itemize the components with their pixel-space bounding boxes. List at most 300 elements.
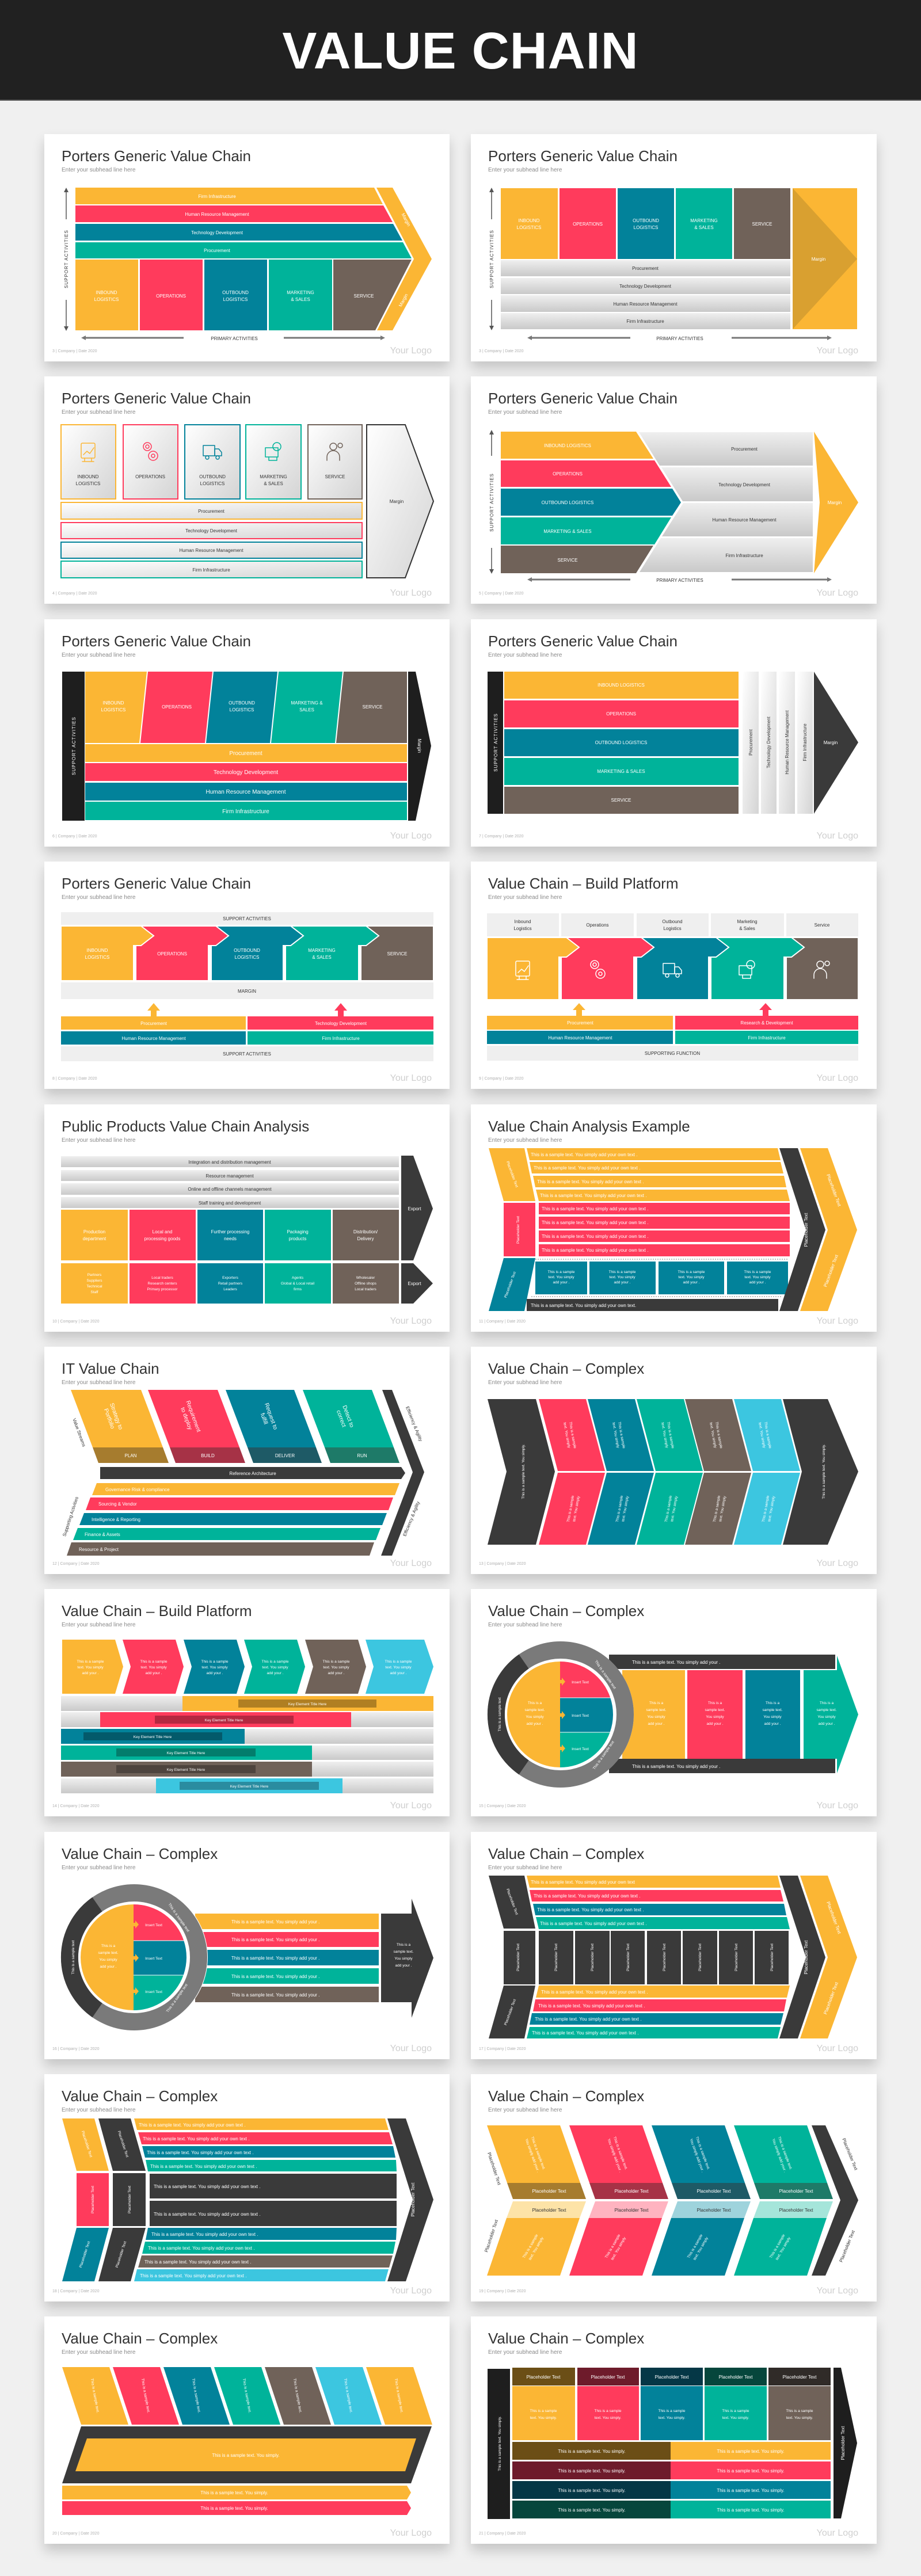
support bars — [85, 744, 407, 820]
partner boxes: firms — [294, 1287, 302, 1291]
efficiency chevron: Efficiency & Agility — [402, 1500, 421, 1537]
bottom text rows: This is a sample text. You simply add your own text . — [532, 2030, 638, 2036]
margin chevron: Margin — [400, 212, 412, 227]
inner circle: This is a — [528, 1701, 542, 1705]
yellow chevron band — [800, 1148, 857, 1311]
dark bottom row — [527, 1299, 778, 1311]
column labels: Placeholder Text — [779, 2208, 813, 2213]
margin block: Margin — [812, 257, 825, 262]
outlined support bars: Procurement — [198, 509, 225, 514]
footer: 3 | Company | Date 2020 — [479, 349, 524, 353]
panel: slide 9 public products analysis — [44, 1104, 450, 1332]
dark chevron band — [779, 1876, 825, 2038]
dark middle rows: This is a sample text. You simply add your own text . — [154, 2212, 260, 2217]
support bar — [488, 672, 503, 814]
top text rows — [527, 1876, 790, 1929]
header cells: Outbound — [662, 919, 683, 924]
yellow chevron band: Placeholder Text — [823, 1981, 839, 2015]
panel: slide 8 build platform with icons — [471, 862, 877, 1089]
column labels: You simply add your . — [524, 2138, 540, 2173]
chevron steps: text. You simply — [262, 1666, 288, 1670]
chevron steps: This is a sample — [262, 1660, 289, 1664]
columns: This is a — [708, 1701, 722, 1705]
subhead: Enter your subhead line here — [488, 2349, 562, 2356]
subhead: Enter your subhead line here — [488, 652, 562, 658]
efficiency chevron: Efficiency & Agility — [405, 1405, 424, 1442]
panel: slide 7 arrow boxes with margin — [44, 862, 450, 1089]
colored chevron columns: text. You simply — [660, 1422, 669, 1449]
top text rows: This is a sample text. You simply add your own text . — [534, 1893, 640, 1899]
colored chevron columns: This is a sample — [615, 1495, 624, 1522]
column labels: Placeholder Text — [697, 2189, 731, 2194]
header cells: Placeholder Text — [718, 2375, 753, 2380]
primary activity boxes: LOGISTICS — [94, 297, 119, 302]
bottom rows — [134, 2228, 397, 2281]
colored chevron columns: text. You simply — [718, 1495, 727, 1522]
colored chevron columns — [539, 1399, 800, 1545]
support bars: Human Resource Management — [548, 1035, 612, 1041]
primary stacked bars: OUTBOUND LOGISTICS — [595, 740, 647, 745]
colored chevron columns: This is a sample — [666, 1422, 675, 1449]
left labels — [484, 2152, 502, 2253]
primary labels: OUTBOUND — [234, 948, 260, 953]
primary boxes: INBOUND — [519, 218, 540, 223]
subhead: Enter your subhead line here — [62, 1865, 136, 1871]
support bars: Firm Infrastructure — [748, 1035, 786, 1041]
yellow chevron band: Placeholder Text — [825, 1173, 842, 1207]
slide title: Porters Generic Value Chain — [488, 390, 678, 407]
slide title: Value Chain – Complex — [488, 1602, 644, 1619]
slide title: Value Chain – Complex — [62, 2087, 218, 2105]
panel: slide 13 build platform gantt — [44, 1589, 450, 1816]
column labels: This is a sample text. — [695, 2136, 710, 2171]
dark placeholder cells: Placeholder Text — [591, 1944, 595, 1971]
footer: 12 | Company | Date 2020 — [52, 1562, 100, 1566]
blue cells: text. You simply — [678, 1275, 705, 1279]
gray management bars — [61, 1156, 399, 1208]
supporting function band: SUPPORTING FUNCTION — [645, 1051, 700, 1056]
panel: slide 11 IT value chain — [44, 1347, 450, 1574]
inner circle: This is a — [101, 1944, 115, 1948]
columns: add your . — [707, 1722, 724, 1726]
body cells: text. You simply. — [786, 2416, 813, 2420]
body cells: This is a sample — [722, 2409, 749, 2413]
column labels: You simply add your . — [771, 2138, 787, 2173]
logo: Your Logo — [390, 2286, 432, 2296]
support bars: Procurement — [140, 1021, 168, 1026]
blue cells: add your . — [553, 1281, 570, 1285]
dark middle rows — [150, 2174, 397, 2226]
subhead: Enter your subhead line here — [488, 894, 562, 901]
chevron steps: text. You simply — [77, 1666, 104, 1670]
blue cells: add your . — [683, 1281, 700, 1285]
yellow chevron band: Placeholder Text — [823, 1253, 839, 1287]
dark chevron band: Placeholder Text — [804, 1940, 809, 1974]
primary boxes: & SALES — [694, 225, 714, 230]
gantt rows: Key Element Title Here — [167, 1768, 205, 1772]
left dark column: Placeholder Text — [128, 2186, 132, 2213]
body cells: text. You simply. — [659, 2416, 685, 2420]
subhead: Enter your subhead line here — [62, 1380, 136, 1386]
footer: 16 | Company | Date 2020 — [52, 2047, 100, 2051]
dark arrow: add your . — [395, 1964, 412, 1968]
value stream parallelograms: RUN — [357, 1453, 367, 1458]
left dark column — [98, 2118, 146, 2281]
yellow text rows: This is a sample text. You simply add your own text . — [537, 1179, 644, 1184]
inner circle — [78, 1902, 189, 2013]
gray support bars: Procurement — [731, 447, 758, 452]
footer: 14 | Company | Date 2020 — [52, 1804, 100, 1808]
margin arrow — [408, 672, 431, 821]
chevron steps: This is a sample — [201, 1660, 229, 1664]
colored chevron columns: text. You simply — [621, 1495, 630, 1522]
left column blocks — [489, 1148, 535, 1311]
left dark bar: This is a sample text. You simply. — [498, 2416, 502, 2471]
ring — [60, 1884, 208, 2031]
logo: Your Logo — [390, 588, 432, 598]
bottom rows: This is a sample text. You simply add your own text . — [148, 2246, 254, 2251]
split rows: This is a sample text. You simply. — [558, 2488, 626, 2493]
margin chevron — [376, 188, 432, 330]
margin arrow: Margin — [417, 739, 422, 753]
export arrow bottom: Export — [408, 1281, 421, 1286]
colored chevron columns: This is a sample — [617, 1422, 626, 1449]
supporting activities label: Supporting Activities — [62, 1496, 79, 1537]
primary stacked bars: MARKETING & SALES — [597, 769, 645, 774]
dark placeholder cells: Placeholder Text — [698, 1944, 702, 1971]
icon boxes: OPERATIONS — [135, 474, 165, 479]
vertical gray strips: Technology Development — [766, 716, 771, 768]
support activity bars: Procurement — [204, 248, 231, 253]
gray support bars — [501, 260, 790, 329]
slanted columns: This is a sample text. — [191, 2378, 201, 2414]
chevron steps: text. You simply — [201, 1666, 228, 1670]
primary boxes: products — [289, 1236, 306, 1241]
margin arrow — [814, 672, 858, 814]
ring: This is a sample text — [71, 1940, 75, 1975]
logo: Your Logo — [390, 1558, 432, 1568]
slide title: Porters Generic Value Chain — [488, 147, 678, 165]
dark arrow: sample text. — [393, 1950, 414, 1954]
dark middle rows: This is a sample text. You simply add your own text . — [154, 2184, 260, 2189]
blue cells: text. You simply — [548, 1275, 574, 1279]
body cells: text. You simply. — [722, 2416, 749, 2420]
gray management bars: Staff training and development — [199, 1201, 261, 1206]
column labels: This is a sample — [769, 2234, 786, 2259]
panel: slide 17 double left column rows — [44, 2074, 450, 2301]
top rows: This is a sample text. You simply add your own text . — [139, 2122, 245, 2128]
primary stacked bars: INBOUND LOGISTICS — [597, 683, 645, 688]
inner circle: You simply — [526, 1715, 544, 1719]
body cells: This is a sample — [659, 2409, 686, 2413]
gray management bars: Online and offline channels management — [188, 1187, 272, 1192]
red text rows: This is a sample text. You simply add your own text . — [542, 1234, 648, 1239]
blue cells: This is a sample — [609, 1270, 636, 1274]
dark chevron — [387, 2118, 433, 2281]
ring: This is a sample text — [592, 1740, 615, 1770]
gray support bars: Technology Development — [718, 482, 771, 487]
primary boxes: processing goods — [144, 1236, 180, 1241]
columns: add your . — [819, 1722, 835, 1726]
partner boxes: Offline shops — [355, 1282, 377, 1286]
primary activity boxes: SERVICE — [354, 294, 374, 299]
value stream parallelograms: fulfill — [259, 1412, 269, 1425]
left labels: Placeholder Text — [486, 2152, 502, 2186]
blue cells: This is a sample — [678, 1270, 705, 1274]
subhead: Enter your subhead line here — [62, 167, 136, 173]
primary labels: LOGISTICS — [235, 955, 259, 960]
left dark column: Placeholder Text — [117, 2131, 129, 2158]
top dark bar: This is a sample text. You simply add your . — [632, 1660, 720, 1665]
primary bars — [501, 432, 681, 573]
primary labels: & SALES — [312, 955, 332, 960]
value stream parallelograms: Requirement — [184, 1400, 201, 1433]
gray support bars: Human Resource Management — [712, 517, 777, 523]
subhead: Enter your subhead line here — [488, 409, 562, 416]
split rows: This is a sample text. You simply. — [558, 2449, 626, 2454]
panel: slide 16 rows with dark cells — [471, 1832, 877, 2059]
column labels: You simply add your . — [607, 2138, 622, 2173]
outlined support bars: Firm Infrastructure — [192, 567, 230, 573]
slanted columns: This is a sample text. — [292, 2378, 302, 2414]
gray support bars: Procurement — [632, 266, 659, 271]
value stream parallelograms: PLAN — [125, 1453, 137, 1458]
margin band — [61, 982, 433, 999]
header cells: Placeholder Text — [526, 2375, 561, 2380]
value stream parallelograms: correct — [335, 1409, 347, 1428]
bottom dark bar — [609, 1759, 835, 1773]
panel: slide 19 slanted columns — [44, 2316, 450, 2544]
left dark column: Placeholder Text — [115, 2240, 127, 2268]
text bars: This is a sample text. You simply add your . — [231, 1956, 319, 1961]
primary axis: PRIMARY ACTIVITIES — [656, 336, 703, 341]
left column blocks: Placeholder Text — [505, 1161, 519, 1188]
partner boxes: Local traders — [151, 1276, 174, 1280]
primary bars: INBOUND LOGISTICS — [544, 443, 591, 448]
value stream parallelograms: DELIVER — [275, 1453, 295, 1458]
inner circle: add your . — [100, 1965, 117, 1969]
up arrows — [147, 1003, 347, 1016]
colored chevron columns: text. You simply — [562, 1422, 571, 1449]
logo: Your Logo — [390, 346, 432, 356]
ring: This is a sample text — [167, 1903, 190, 1933]
bottom rows: This is a sample text. You simply add your own text . — [151, 2232, 258, 2237]
support footer band — [61, 1046, 433, 1061]
columns: This is a — [766, 1701, 779, 1705]
red text rows: This is a sample text. You simply add your own text . — [542, 1220, 648, 1225]
primary parallelograms: OPERATIONS — [162, 704, 192, 710]
primary activity boxes: OPERATIONS — [156, 294, 186, 299]
support bars — [61, 1016, 433, 1045]
primary bars: OPERATIONS — [553, 471, 583, 477]
columns: You simply — [706, 1715, 724, 1719]
reference architecture bar — [100, 1467, 405, 1479]
primary parallelograms: OUTBOUND — [229, 700, 255, 706]
chevron steps: This is a sample — [77, 1660, 104, 1664]
support bars: Firm Infrastructure — [222, 809, 269, 815]
slide title: Value Chain – Complex — [62, 1845, 218, 1862]
support bars: Human Resource Management — [121, 1036, 186, 1041]
footer: 7 | Company | Date 2020 — [479, 834, 524, 839]
primary activities axis — [81, 336, 385, 341]
margin outline arrow — [367, 425, 433, 578]
colored chevron columns: text. You simply — [611, 1422, 620, 1449]
left dark column — [489, 1876, 535, 2038]
slide title: Public Products Value Chain Analysis — [62, 1118, 309, 1135]
gantt rows: Key Element Title Here — [288, 1702, 327, 1706]
header cells: Logistics — [513, 926, 532, 931]
support axis: SUPPORT ACTIVITIES — [489, 230, 494, 288]
primary bars: MARKETING & SALES — [543, 529, 592, 534]
primary stacked bars: SERVICE — [611, 798, 631, 803]
column labels: Placeholder Text — [532, 2189, 566, 2194]
subhead: Enter your subhead line here — [488, 1622, 562, 1628]
slide title: Value Chain – Complex — [488, 2087, 644, 2105]
header cells — [512, 2368, 831, 2386]
colored chevron columns: This is a sample — [714, 1422, 723, 1449]
subhead: Enter your subhead line here — [62, 894, 136, 901]
gray support bars: Human Resource Management — [613, 302, 678, 307]
supporting activity bars: Resource & Project — [79, 1547, 119, 1552]
colored chevron columns: This is a sample — [568, 1422, 577, 1449]
body cells: This is a sample — [786, 2409, 813, 2413]
column labels: This is a sample text. — [777, 2136, 793, 2171]
panel: slide 1 porters generic value chain — [44, 134, 450, 361]
column labels: text. You simply — [528, 2236, 545, 2261]
primary boxes: LOGISTICS — [517, 225, 541, 230]
gray management bars: Resource management — [205, 1173, 254, 1179]
primary activity boxes: LOGISTICS — [223, 297, 248, 302]
panel: slide 14 circle with columns — [471, 1589, 877, 1816]
value stream parallelograms: Strategy to — [108, 1403, 124, 1431]
partner boxes: Leaders — [223, 1287, 237, 1291]
body cells: text. You simply. — [595, 2416, 621, 2420]
primary activity boxes: & SALES — [291, 297, 310, 302]
split rows: This is a sample text. You simply. — [717, 2508, 785, 2513]
primary labels: MARKETING — [308, 948, 336, 953]
primary parallelograms: SERVICE — [363, 704, 382, 710]
column labels: text. You simply — [610, 2236, 627, 2261]
columns: add your . — [648, 1722, 665, 1726]
chevron columns — [487, 2125, 833, 2276]
column labels: text. You simply — [775, 2236, 791, 2261]
primary boxes: Delivery — [357, 1236, 374, 1241]
panel: slide 3 icon boxes — [44, 376, 450, 604]
columns: You simply — [817, 1715, 836, 1719]
chevron steps — [62, 1640, 433, 1694]
yellow chevron band: Placeholder Text — [825, 1901, 842, 1935]
efficiency chevron — [381, 1390, 424, 1556]
main title: VALUE CHAIN — [282, 22, 639, 80]
gray support bars: Technology Development — [619, 284, 672, 289]
logo: Your Logo — [817, 1316, 858, 1326]
export arrow top — [401, 1156, 433, 1260]
support bars: Technology Development — [214, 769, 278, 776]
value stream parallelograms: Request to — [263, 1403, 279, 1431]
primary parallelograms: SALES — [299, 707, 314, 712]
columns: sample text. — [646, 1708, 667, 1712]
primary boxes: OPERATIONS — [573, 222, 603, 227]
header banner — [0, 0, 921, 101]
footer: 10 | Company | Date 2020 — [52, 1320, 100, 1324]
support bar: SUPPORT ACTIVITIES — [493, 713, 498, 772]
panel: slide 6 stacked bars with vertical support — [471, 619, 877, 847]
supporting function band — [487, 1046, 858, 1061]
partner boxes: Staff — [90, 1290, 98, 1294]
value stream parallelograms: BUILD — [201, 1453, 215, 1458]
blue cells: text. You simply — [609, 1275, 635, 1279]
primary stacked bars: OPERATIONS — [606, 711, 636, 717]
subhead: Enter your subhead line here — [488, 1380, 562, 1386]
inner circle: Insert Text — [572, 1714, 589, 1718]
slide title: Porters Generic Value Chain — [488, 632, 678, 650]
support activity bars: Firm Infrastructure — [198, 194, 236, 199]
support axis: SUPPORT ACTIVITIES — [489, 473, 494, 532]
dark placeholder cells — [539, 1931, 789, 1984]
ring: This is a sample text — [593, 1660, 616, 1690]
dark chevron band: Placeholder Text — [804, 1213, 809, 1247]
column labels: Placeholder Text — [532, 2208, 566, 2213]
primary activity boxes — [75, 260, 412, 330]
partner boxes: Local traders — [355, 1287, 377, 1291]
primary axis — [527, 577, 832, 583]
dark arrow — [381, 1899, 433, 2018]
primary bars: SERVICE — [558, 558, 577, 563]
support bars: Firm Infrastructure — [322, 1036, 360, 1041]
colored chevron columns: This is a sample — [763, 1422, 772, 1449]
colored chevron columns: text. You simply — [670, 1495, 679, 1522]
top rows — [134, 2118, 397, 2171]
body cells: This is a sample — [530, 2409, 557, 2413]
inner circle: You simply — [99, 1958, 117, 1962]
columns: You simply — [647, 1715, 665, 1719]
body cells: text. You simply. — [530, 2416, 557, 2420]
primary bars: OUTBOUND LOGISTICS — [542, 500, 593, 505]
columns: sample text. — [705, 1708, 725, 1712]
dark arrow: You simply — [394, 1957, 413, 1961]
top dark bar — [609, 1655, 835, 1669]
icon boxes: LOGISTICS — [200, 481, 224, 486]
supporting activity bars: Governance Risk & compliance — [105, 1487, 170, 1492]
top rows: This is a sample text. You simply add your own text . — [150, 2164, 257, 2169]
margin chevron: Margin — [398, 293, 409, 308]
column labels: This is a sample — [604, 2234, 622, 2259]
icon boxes: OUTBOUND — [199, 474, 226, 479]
partner boxes — [61, 1263, 399, 1304]
primary boxes: Further processing — [211, 1229, 249, 1234]
arrow bars: This is a sample text. You simply. — [200, 2506, 268, 2511]
dark placeholder cells: Placeholder Text — [663, 1944, 667, 1971]
red text rows — [539, 1203, 790, 1256]
header cells: Operations — [586, 923, 609, 928]
primary boxes: Packaging — [287, 1229, 309, 1234]
colored chevron columns: text. You simply — [572, 1495, 581, 1522]
icon boxes: SERVICE — [325, 474, 345, 479]
header cells: Inbound — [515, 919, 531, 924]
chevron steps: text. You simply — [323, 1666, 349, 1670]
chevron steps: add your . — [82, 1671, 99, 1675]
red text rows: This is a sample text. You simply add your own text . — [542, 1248, 648, 1253]
value streams label: Value Streams — [71, 1417, 86, 1447]
split rows: This is a sample text. You simply. — [717, 2468, 785, 2474]
column labels: Placeholder Text — [615, 2189, 649, 2194]
dark chevron: Placeholder Text — [410, 2182, 416, 2217]
dark placeholder cells: Placeholder Text — [626, 1944, 630, 1971]
slanted columns: This is a sample text. — [90, 2378, 100, 2414]
primary labels: INBOUND — [87, 948, 108, 953]
primary activities axis: PRIMARY ACTIVITIES — [211, 336, 258, 341]
subhead: Enter your subhead line here — [488, 1137, 562, 1144]
